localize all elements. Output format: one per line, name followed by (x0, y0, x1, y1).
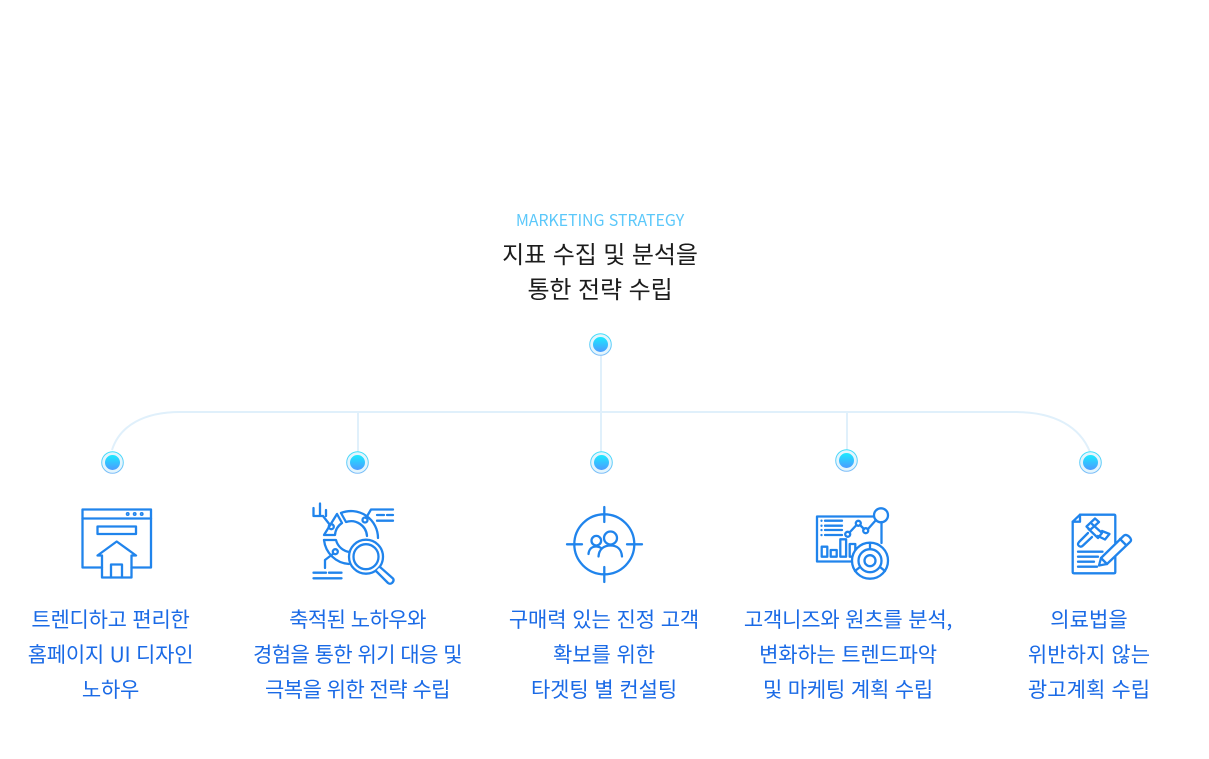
caption: column 4: 및 마케팅 계획 수립 (763, 674, 933, 704)
main heading: 통한 전략 수립 (527, 270, 673, 305)
main heading: 지표 수집 및 분석을 (502, 235, 698, 270)
caption: column 4 (744, 604, 952, 704)
caption: column 2: 극복을 위한 전략 수립 (265, 674, 450, 704)
node: top (590, 334, 611, 355)
caption: column 1: 트렌디하고 편리한 (31, 604, 190, 634)
node: column 1 (102, 452, 123, 473)
caption: column 5: 위반하지 않는 (1028, 639, 1150, 669)
caption: column 2 (253, 604, 462, 704)
main heading (502, 235, 698, 305)
eyebrow label: MARKETING STRATEGY (516, 207, 684, 231)
caption: column 3: 확보를 위한 (553, 639, 655, 669)
caption: column 3: 타겟팅 별 컨설팅 (531, 674, 677, 704)
icon: analytics dashboard (817, 508, 888, 579)
caption: column 3 (509, 604, 699, 704)
caption: column 1: 노하우 (82, 674, 139, 704)
icon: target audience (567, 507, 642, 582)
node: column 3 (591, 452, 612, 473)
icon: website home (82, 510, 151, 578)
caption: column 2: 경험을 통한 위기 대응 및 (253, 639, 462, 669)
connector lines (112, 352, 1090, 452)
caption: column 4: 고객니즈와 원츠를 분석, (744, 604, 952, 634)
caption: column 3: 구매력 있는 진정 고객 (509, 604, 699, 634)
node: column 4 (836, 450, 857, 471)
caption: column 4: 변화하는 트렌드파악 (759, 639, 937, 669)
caption: column 1: 홈페이지 UI 디자인 (28, 639, 193, 669)
caption: column 5: 의료법을 (1050, 604, 1128, 634)
caption: column 1 (28, 604, 193, 704)
node: column 2 (347, 452, 368, 473)
icon: donut chart with magnifier (314, 504, 394, 584)
caption: column 2: 축적된 노하우와 (289, 604, 426, 634)
caption: column 5 (1028, 604, 1150, 704)
icon: legal document with gavel and pencil (1073, 515, 1131, 573)
node: column 5 (1080, 452, 1101, 473)
caption: column 5: 광고계획 수립 (1028, 674, 1150, 704)
